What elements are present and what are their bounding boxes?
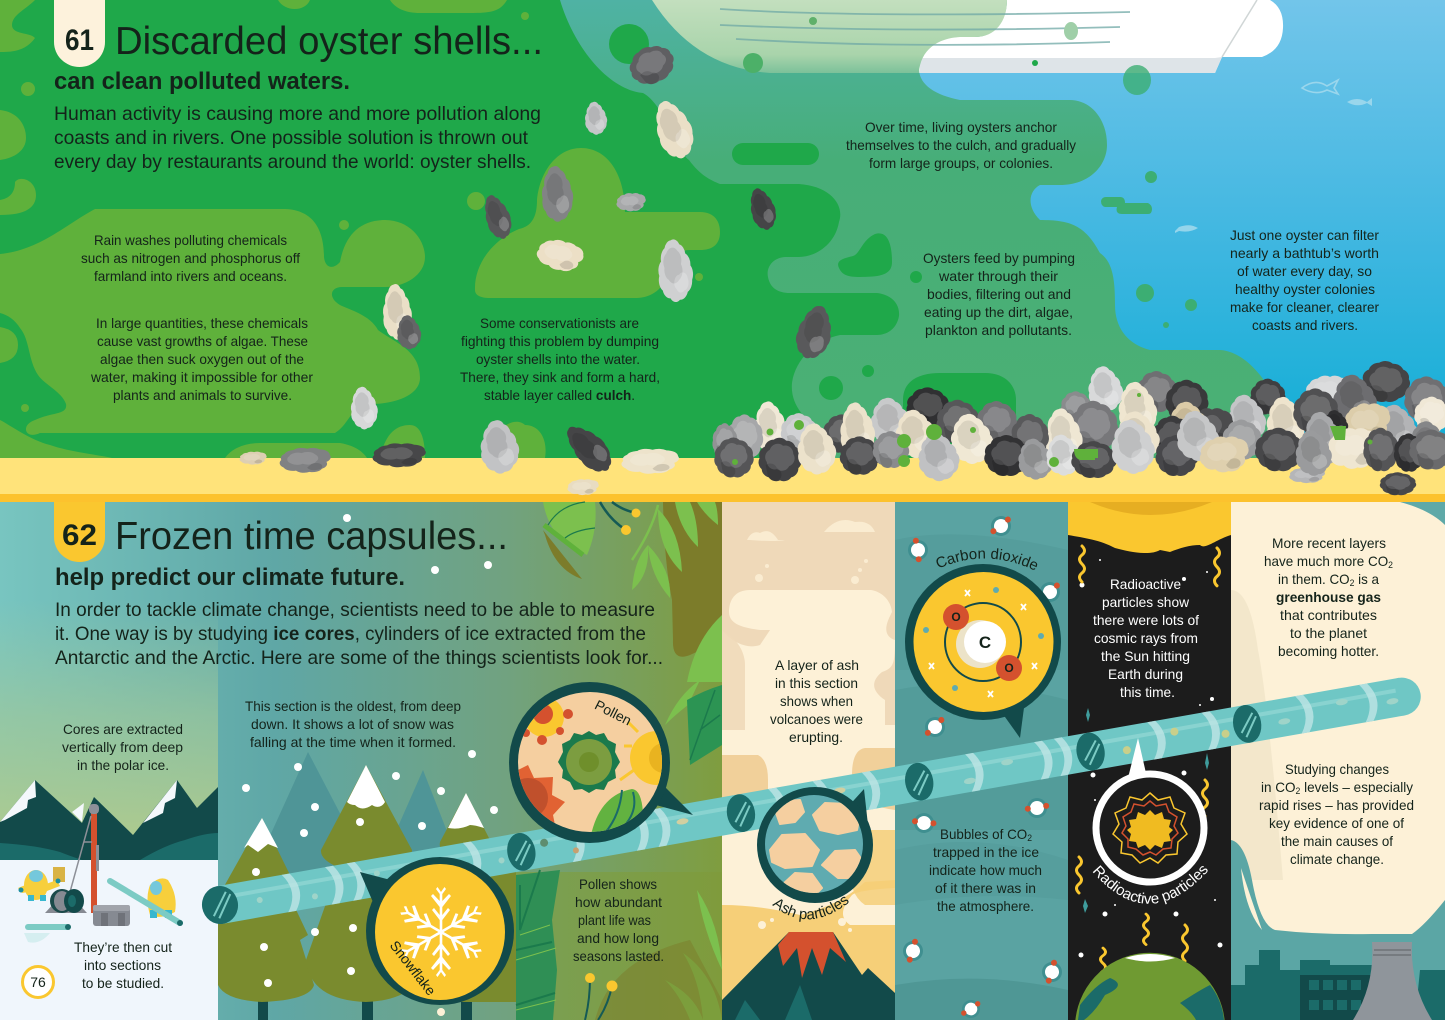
- label: Carbon dioxide: Carbon dioxide: [936, 548, 1038, 570]
- text: radioactive particles: particles show: [1102, 594, 1190, 610]
- text: cores extracted: [62, 721, 183, 773]
- intro text: it. One way is by studying ice cores, cylinders of ice extracted from the: [55, 623, 646, 645]
- intro text: Antarctic and the Arctic. Here are some of the things scientists look for...: [55, 647, 663, 669]
- text: greenhouse gas: that contributes: [1280, 607, 1377, 623]
- text: oldest section: falling at the time when it formed.: [250, 734, 456, 750]
- text: pollen shows: how abundant: [575, 894, 662, 910]
- text: cut into sections: into sections: [84, 957, 161, 973]
- text: culch: fighting this problem by dumping: [461, 333, 659, 349]
- text: pollen shows: and how long: [577, 930, 659, 946]
- text: bubbles of CO2: of it there was in: [935, 880, 1036, 896]
- ice core cylinder: [199, 675, 1424, 927]
- icon: cooling tower: [1353, 942, 1432, 1020]
- polar mountains and rig scene: [0, 780, 218, 1020]
- icon: scattered sinking shells: [240, 38, 1416, 495]
- text: oysters feed: [923, 250, 1075, 338]
- text: culch: stable layer called culch.: [484, 387, 635, 403]
- magnifier: carbon dioxide molecule: C: [979, 633, 991, 652]
- text: culch: oyster shells into the water.: [476, 351, 640, 367]
- heading: Discarded oyster shells: Discarded oyster shells...: [115, 20, 543, 63]
- text: bathtub of water: Just one oyster can filter: [1230, 227, 1379, 243]
- text: greenhouse gas: to the planet: [1290, 625, 1367, 641]
- text: algae growth: algae then suck oxygen out of the: [100, 351, 304, 367]
- text: cores extracted: Cores are extracted: [63, 721, 183, 737]
- magnifier: radioactive particles: [1092, 738, 1208, 904]
- text: algae growth: cause vast growths of algae. These: [97, 333, 308, 349]
- text: layer of ash: A layer of ash: [775, 657, 859, 673]
- text: oldest section: down. It shows a lot of snow was: [251, 716, 454, 732]
- icon: fish: [1175, 80, 1372, 233]
- icon: snowflake: [397, 887, 485, 977]
- text: bathtub of water: healthy oyster colonies: [1235, 281, 1375, 297]
- ash layer background with volcano: [722, 502, 895, 1020]
- text: layer of ash: volcanoes were: [770, 711, 863, 727]
- text: culch: There, they sink and form a hard,: [460, 369, 660, 385]
- text: studying CO2 changes: in CO: [1261, 779, 1297, 795]
- text: layer of ash: shows when: [780, 693, 853, 709]
- text: bathtub of water: nearly a bathtub’s worth: [1230, 245, 1379, 261]
- polluted green water overlay: [560, 0, 1300, 460]
- text: radioactive particles: Radioactive: [1110, 576, 1181, 592]
- text: oysters anchor: themselves to the culch, and gradually: [846, 137, 1076, 153]
- text: bubbles of CO2: Bubbles of CO: [940, 826, 1031, 842]
- text: greenhouse gas: in them. CO: [1278, 571, 1353, 587]
- icon: drilling rig: [45, 804, 130, 926]
- text: pollen shows: plant life was: [578, 912, 651, 928]
- text: studying CO2 changes: levels – especially: [1300, 779, 1413, 795]
- text: studying CO2 changes: rapid rises – has provided: [1259, 797, 1414, 813]
- text: rain washes chemicals: farmland into rivers and oceans.: [94, 268, 287, 284]
- text: greenhouse gas: 2: [1350, 578, 1354, 588]
- text: pollen shows: [573, 876, 664, 964]
- text: layer of ash: erupting.: [789, 729, 843, 745]
- seabed sand: [0, 458, 1445, 502]
- text: studying CO2 changes: the main causes of: [1281, 833, 1393, 849]
- text: oysters anchor: [846, 119, 1076, 171]
- text: algae growth: plants and animals to survive.: [113, 387, 292, 403]
- blue clear water: [900, 0, 1445, 460]
- text: greenhouse gas: [1264, 535, 1393, 659]
- light algae blooms: [0, 0, 720, 458]
- oyster shell colony pile: [712, 361, 1445, 481]
- text: cut into sections: They’re then cut: [74, 939, 172, 955]
- panel: ice core section backgrounds: [0, 502, 1445, 1020]
- jungle leaves: [516, 502, 722, 1020]
- number tab 61: [54, 0, 105, 67]
- text: bathtub of water: coasts and rivers.: [1252, 317, 1358, 333]
- subheading: can clean polluted waters.: [54, 68, 350, 95]
- text: oysters feed: eating up the dirt, algae,: [924, 304, 1073, 320]
- factory smoke and skyline: [1231, 502, 1445, 1020]
- intro text: coasts and in rivers. One possible solution is thrown out: [54, 127, 529, 149]
- text: bubbles of CO2: trapped in the ice: [933, 844, 1039, 860]
- number tab 62: 62: [62, 519, 97, 552]
- text: studying CO2 changes: climate change.: [1290, 851, 1384, 867]
- icon: whale shaped boat hull: [645, 0, 1283, 73]
- text: layer of ash: [770, 657, 863, 745]
- text: bubbles of CO2: indicate how much: [929, 862, 1042, 878]
- intro text: In order to tackle climate change, scientists need to be able to measure: [55, 599, 655, 621]
- icon: planet Earth: [1075, 953, 1225, 1020]
- text: greenhouse gas: More recent layers: [1272, 535, 1386, 551]
- magnifier: carbon dioxide molecule: O: [1004, 661, 1014, 675]
- text: bubbles of CO2: the atmosphere.: [937, 898, 1034, 914]
- text: greenhouse gas: have much more CO: [1264, 553, 1393, 569]
- text: pollen shows: Pollen shows: [579, 876, 657, 892]
- text: oysters feed: water through their: [938, 268, 1058, 284]
- text: algae growth: [90, 315, 313, 403]
- text: radioactive particles: the Sun hitting: [1101, 648, 1190, 664]
- text: greenhouse gas: 2: [1388, 560, 1393, 570]
- text: culch: [460, 315, 660, 403]
- text: rain washes chemicals: such as nitrogen and phosphorus off: [81, 250, 300, 266]
- text: bathtub of water: [1230, 227, 1379, 333]
- text: cut into sections: [74, 939, 172, 991]
- text: radioactive particles: there were lots of: [1093, 612, 1199, 628]
- text: algae growth: water, making it impossible for other: [90, 369, 313, 385]
- magnifier: carbon dioxide molecule: O: [951, 610, 961, 624]
- dark green patches and spots: [609, 24, 1038, 460]
- icon: volcano: [722, 918, 895, 1020]
- text: studying CO2 changes: 2: [1296, 786, 1300, 796]
- magnifier: snowflake: [360, 857, 514, 1005]
- text: layer of ash: in this section: [775, 675, 858, 691]
- text: studying CO2 changes: key evidence of one of: [1269, 815, 1404, 831]
- intro text: [55, 599, 663, 669]
- text: bubbles of CO2: [929, 826, 1042, 914]
- sun and cosmic rays: [1068, 502, 1231, 1020]
- text: greenhouse gas: becoming hotter.: [1278, 643, 1379, 659]
- text: oldest section: [245, 698, 461, 750]
- text: bubbles of CO2: 2: [1027, 833, 1032, 843]
- label: Radioactive particles: Radioactive particles: [1092, 865, 1208, 904]
- text: culch: Some conservationists are: [480, 315, 639, 331]
- text: algae growth: In large quantities, these chemicals: [96, 315, 308, 331]
- text: bathtub of water: of water every day, so: [1237, 263, 1372, 279]
- text: greenhouse gas: greenhouse gas: [1276, 589, 1381, 605]
- page number: [22, 966, 54, 998]
- magnifier: pollen: [508, 682, 693, 843]
- text: radioactive particles: cosmic rays from: [1094, 630, 1198, 646]
- intro text: Human activity is causing more and more pollution along: [54, 103, 541, 125]
- text: radioactive particles: [1093, 576, 1199, 700]
- text: radioactive particles: Earth during: [1108, 666, 1183, 682]
- teal section wave bands: [895, 534, 1068, 1020]
- text: cores extracted: in the polar ice.: [77, 757, 169, 773]
- magnifier: ash particles: [757, 787, 873, 922]
- subheading: help predict our climate future.: [55, 564, 405, 591]
- text: oysters feed: Oysters feed by pumping: [923, 250, 1075, 266]
- text: studying CO2 changes: [1259, 761, 1414, 867]
- text: oysters anchor: Over time, living oysters anchor: [865, 119, 1057, 135]
- text: greenhouse gas: is a: [1354, 571, 1379, 587]
- number tab 62: [54, 502, 105, 562]
- text: oysters feed: bodies, filtering out and: [927, 286, 1071, 302]
- text: cut into sections: to be studied.: [82, 975, 164, 991]
- panel: oyster shells section background: [0, 0, 1445, 460]
- text: cores extracted: vertically from deep: [62, 739, 183, 755]
- icon: scientists in yellow suits: [18, 867, 183, 943]
- heading: Frozen time capsules: Frozen time capsules...: [115, 515, 508, 558]
- text: bathtub of water: make for cleaner, clearer: [1230, 299, 1379, 315]
- label: Pollen: Pollen: [592, 697, 634, 729]
- number tab 61: 61: [65, 24, 94, 57]
- label: Ash particles: Ash particles: [772, 896, 848, 922]
- text: oysters feed: plankton and pollutants.: [925, 322, 1072, 338]
- text: pollen shows: seasons lasted.: [573, 948, 664, 964]
- label: Snowflake: Snowflake: [387, 938, 439, 998]
- intro text: every day by restaurants around the world: oyster shells.: [54, 151, 531, 173]
- mountains and snowy trees: [218, 514, 516, 1020]
- green drifting spots in the water: [743, 17, 1197, 328]
- text: studying CO2 changes: Studying changes: [1285, 761, 1389, 777]
- text: radioactive particles: this time.: [1120, 684, 1175, 700]
- magnifier: carbon dioxide molecule: [905, 548, 1061, 738]
- text: oysters anchor: form large groups, or colonies.: [869, 155, 1053, 171]
- intro text: [54, 103, 541, 173]
- whale tinted by pollution: [652, 0, 1130, 73]
- text: rain washes chemicals: [81, 232, 300, 284]
- text: rain washes chemicals: Rain washes polluting chemicals: [94, 232, 287, 248]
- text: oldest section: This section is the oldest, from deep: [245, 698, 461, 714]
- page number: 76: [30, 974, 46, 990]
- icon: carbon dioxide bubbles: [900, 513, 1065, 1020]
